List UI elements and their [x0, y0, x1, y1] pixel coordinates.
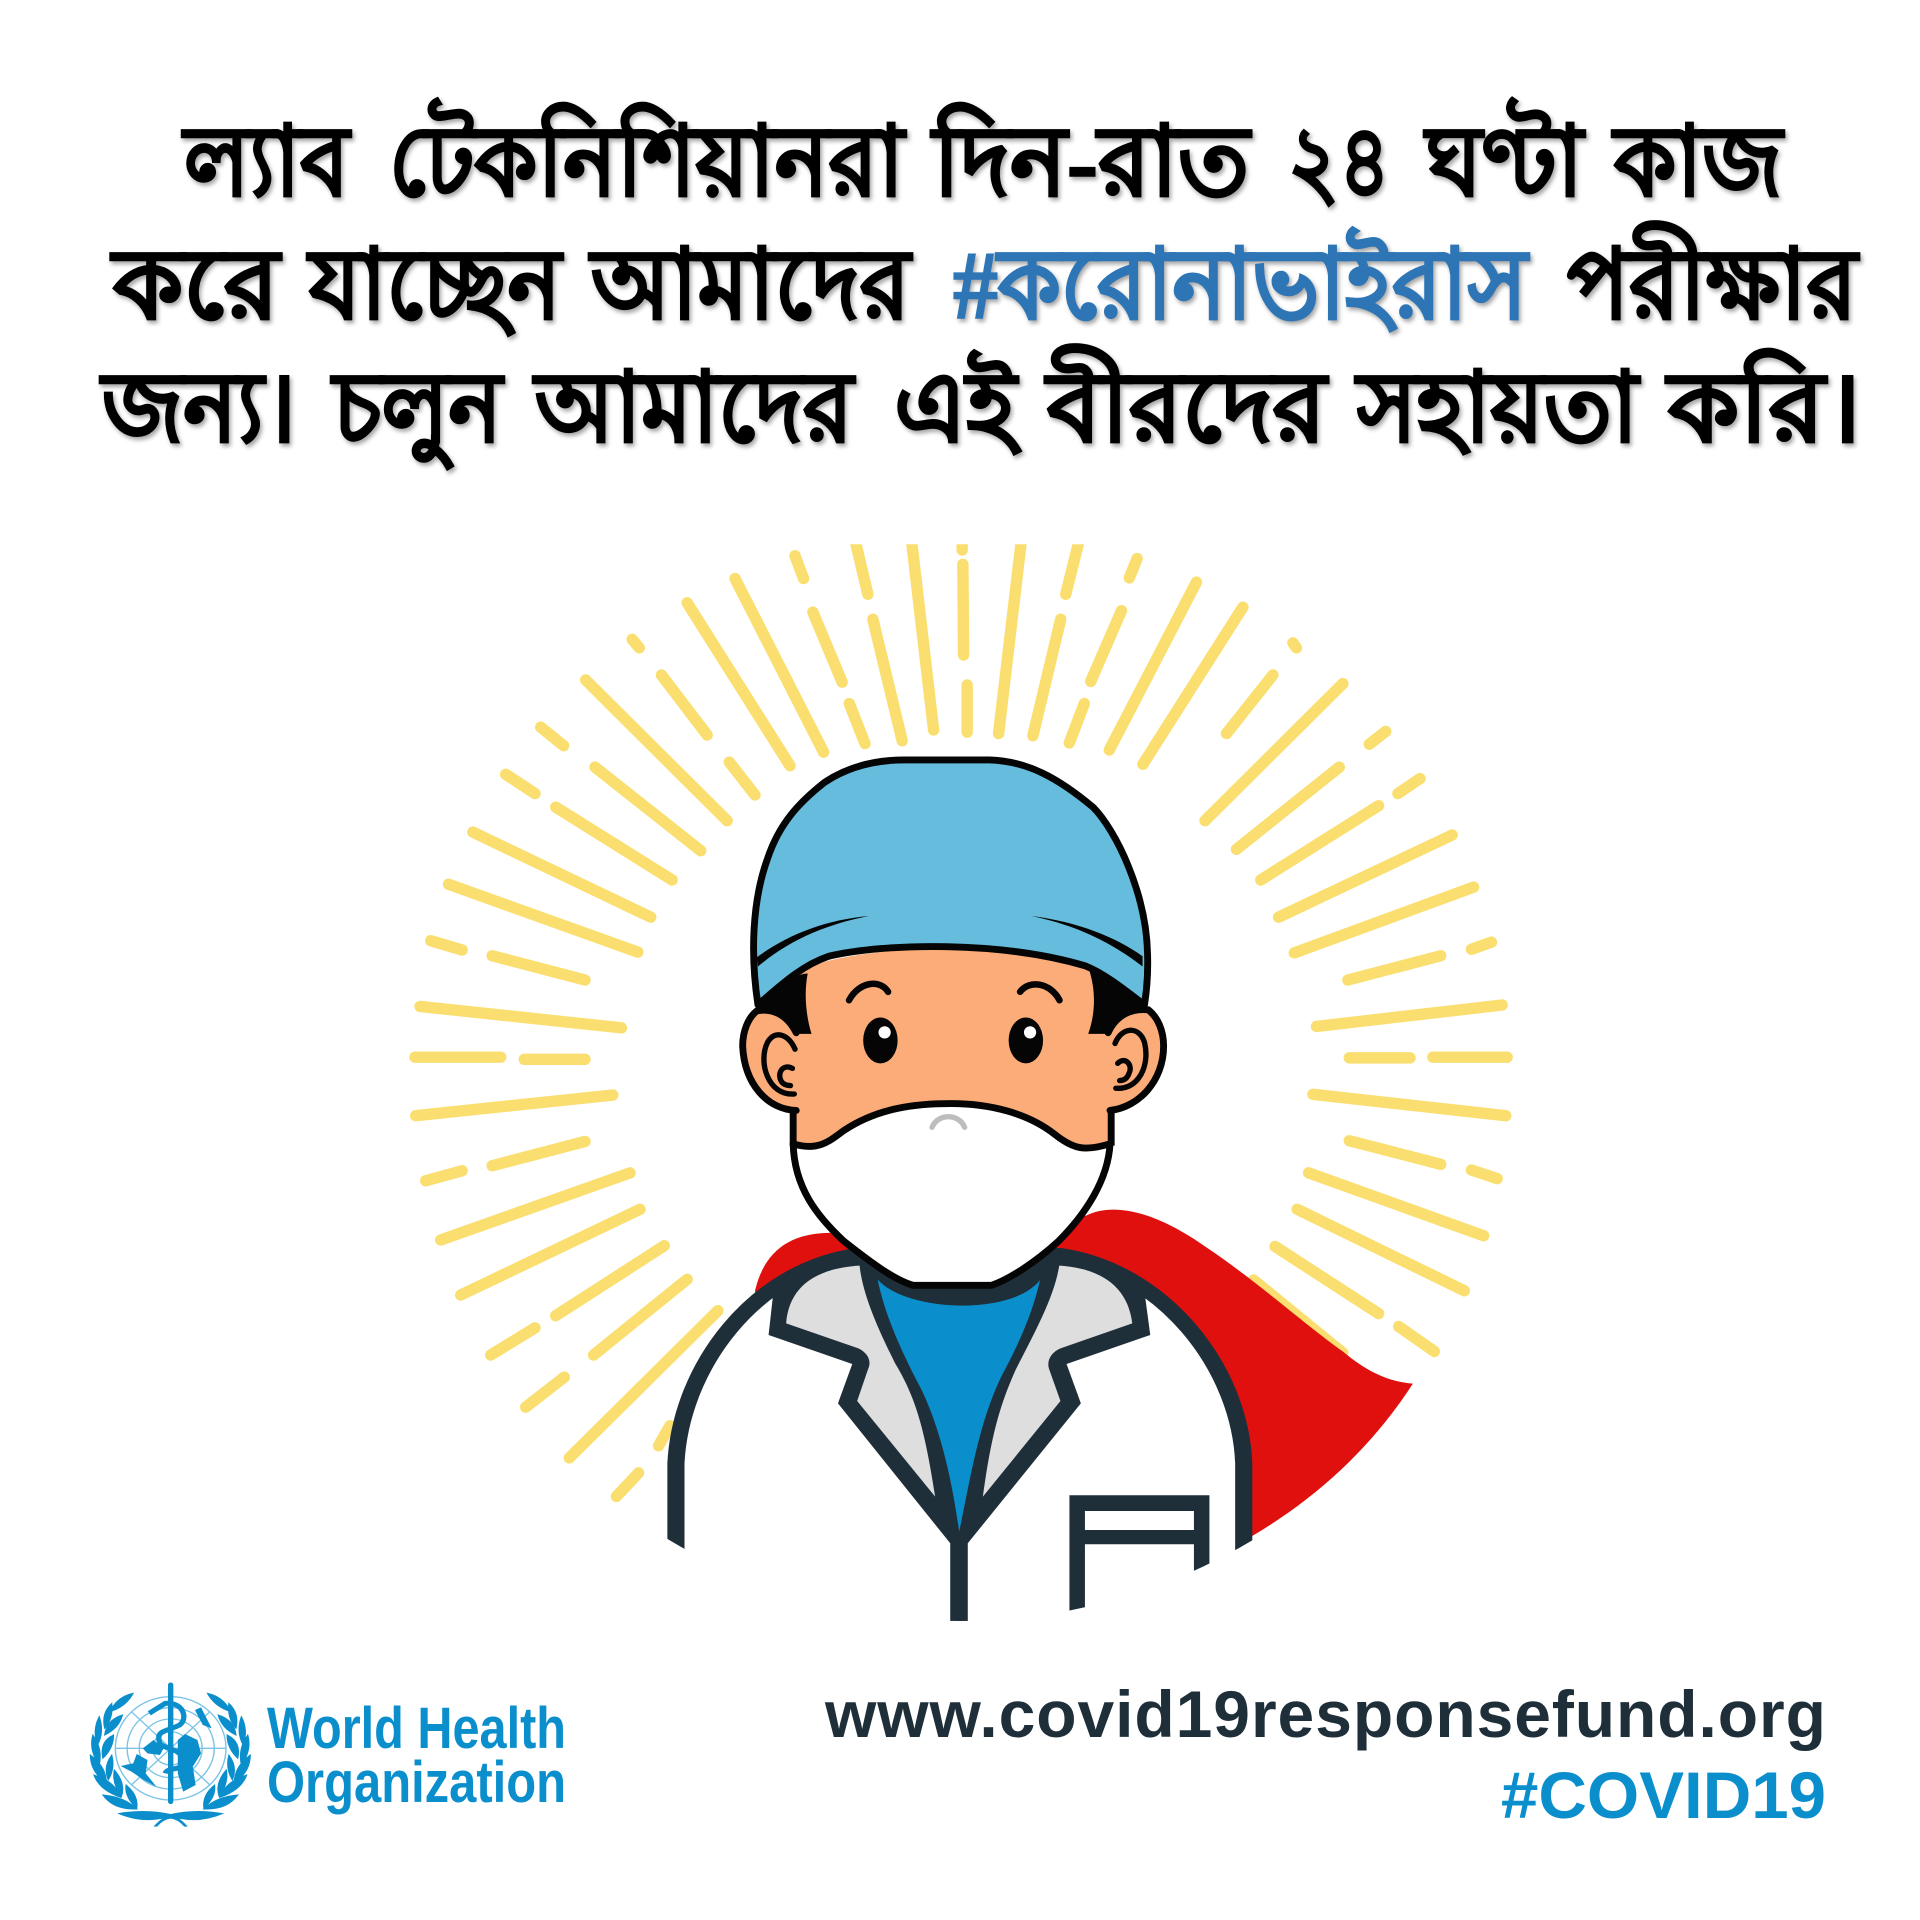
title line 2 with blue hashtag: যাচ্ছেন: [306, 232, 564, 340]
hair: [760, 970, 1144, 1034]
grey lapel left: [786, 1266, 935, 1497]
body: coat, cape, shirt: [676, 1210, 1413, 1653]
surgical cap: [754, 760, 1148, 1005]
title: Bengali headline: [99, 97, 1861, 471]
neck lines: [793, 1109, 1111, 1146]
title line 2 with blue hashtag: [110, 221, 1860, 340]
website URL: www.covid19responsefund.org: [824, 1677, 1826, 1751]
title line 3: বীরদের: [1044, 344, 1329, 463]
WHO wordmark: [267, 1696, 566, 1815]
illustration: lab technician hero with sun rays: [415, 540, 1507, 1653]
title line 3: জন্য।: [99, 355, 296, 463]
World Health: World Health: [267, 1696, 566, 1761]
continents: [121, 1707, 212, 1792]
right ear: [1093, 1010, 1164, 1110]
title line 2 with blue hashtag: পরীক্ষার: [1567, 221, 1860, 340]
title line 1: টেকনিশিয়ানরা: [389, 98, 907, 217]
laurel right: [204, 1693, 250, 1809]
title line 3: সহায়তা: [1354, 355, 1641, 463]
grey lapel right: [983, 1266, 1132, 1497]
title line 3: করি।: [1665, 348, 1861, 463]
WHO logo: [90, 1685, 566, 1827]
ear details: [764, 1030, 1146, 1094]
title line 2 with blue hashtag: আমাদের: [588, 232, 913, 340]
dark collar silhouette and placket: [769, 1253, 1150, 1622]
title line 1: কাজ: [1611, 109, 1785, 217]
pocket: [1069, 1495, 1210, 1610]
white face mask: [793, 1104, 1110, 1285]
title line 2 with blue hashtag: করে: [110, 232, 282, 340]
coat, lapels and pocket: [676, 1253, 1244, 1653]
staff: [163, 1685, 178, 1802]
title line 3: এই: [894, 349, 1022, 463]
title line 1: ঘণ্টা: [1423, 97, 1586, 217]
head: cap, face, mask: [743, 760, 1164, 1285]
left ear: [743, 1010, 810, 1110]
eyebrows: [849, 984, 1060, 1000]
blue shirt: [878, 1279, 1040, 1532]
Organization: Organization: [267, 1750, 566, 1815]
title line 1: [181, 97, 1785, 217]
title line 1: দিন-রাত: [930, 102, 1252, 217]
hashtag COVID19: #COVID19: [1501, 1758, 1826, 1832]
red cape: [755, 1210, 1413, 1542]
title line 3: চলুন: [330, 355, 505, 471]
title line 3: আমাদের: [532, 355, 856, 463]
snake: [149, 1703, 184, 1773]
sun rays: [415, 540, 1507, 1496]
WHO emblem: [90, 1685, 250, 1827]
globe grid: [115, 1697, 226, 1800]
face: [792, 949, 1112, 1146]
coat outline: [676, 1255, 1244, 1587]
white coat fill: [756, 1298, 1236, 1535]
ribbon: [117, 1811, 224, 1827]
laurel left: [90, 1693, 137, 1809]
eyes: [863, 1017, 1043, 1063]
title line 2 with blue hashtag: #করোনাভাইরাস: [953, 226, 1530, 340]
nose under mask: [932, 1117, 965, 1127]
title line 1: ২৪: [1288, 109, 1390, 217]
cap band creases: [757, 916, 1143, 967]
title line 1: ল্যাব: [181, 109, 352, 217]
title line 3: [99, 344, 1861, 471]
